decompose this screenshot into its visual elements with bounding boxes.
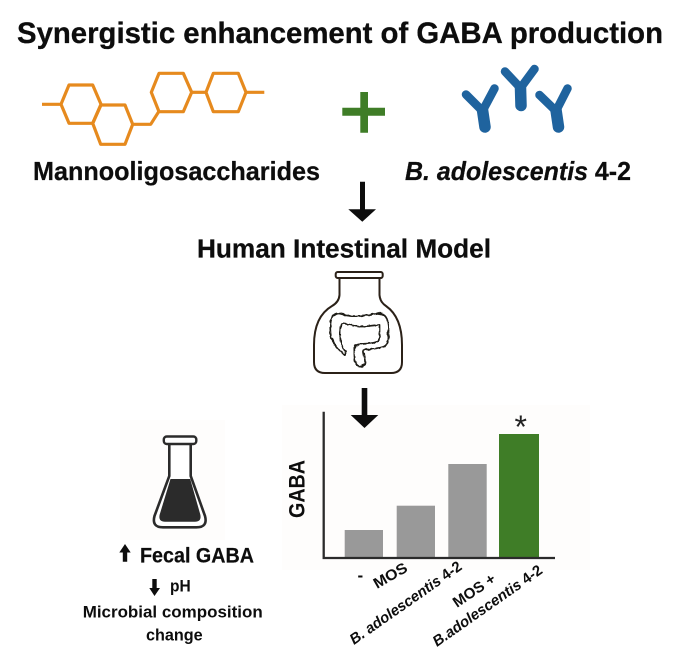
text: Fecal GABA: Fecal GABA <box>140 544 254 568</box>
arrow: up, fecal GABA <box>119 544 131 562</box>
category label: B.adolescentis 4-2: B.adolescentis 4-2 <box>430 562 546 650</box>
arrow: down to model <box>348 182 376 222</box>
title: Synergistic enhancement of GABA production <box>17 17 663 50</box>
text: pH: pH <box>170 578 191 596</box>
y axis label: GABA <box>284 460 310 518</box>
bar chart: GABA <box>284 409 555 650</box>
bar: MOS <box>397 506 435 557</box>
significance star: * <box>514 409 527 445</box>
bar: control <box>345 530 383 557</box>
label: Mannooligosaccharides: Mannooligosaccharides <box>33 156 320 186</box>
category label: MOS +: MOS + <box>450 570 499 611</box>
icon: B. adolescentis bacteria <box>466 69 568 127</box>
arrow: down, pH <box>149 579 160 596</box>
arrow: down to results <box>351 388 378 428</box>
bar: B. adolescentis 4-2 <box>448 464 487 557</box>
icon: plus sign <box>342 92 385 133</box>
label: B. adolescentis 4-2: B. adolescentis 4-2 <box>405 156 631 186</box>
text: Microbial composition change <box>83 602 263 644</box>
icon: culture flask <box>154 436 206 527</box>
category label: B. adolescentis 4-2: B. adolescentis 4-2 <box>347 558 465 648</box>
category label: control: - <box>358 566 363 585</box>
bar: MOS + B. adolescentis 4-2 <box>499 434 539 557</box>
text: Microbial composition change: Microbial composition <box>83 602 263 622</box>
heading: Human Intestinal Model: Human Intestinal Model <box>197 236 491 264</box>
axes <box>324 412 555 558</box>
text: Microbial composition change: change <box>146 626 203 644</box>
icon: intestine in flask <box>314 272 402 373</box>
icon: mannooligosaccharide chain <box>42 73 264 144</box>
category label: MOS: MOS <box>370 559 411 592</box>
